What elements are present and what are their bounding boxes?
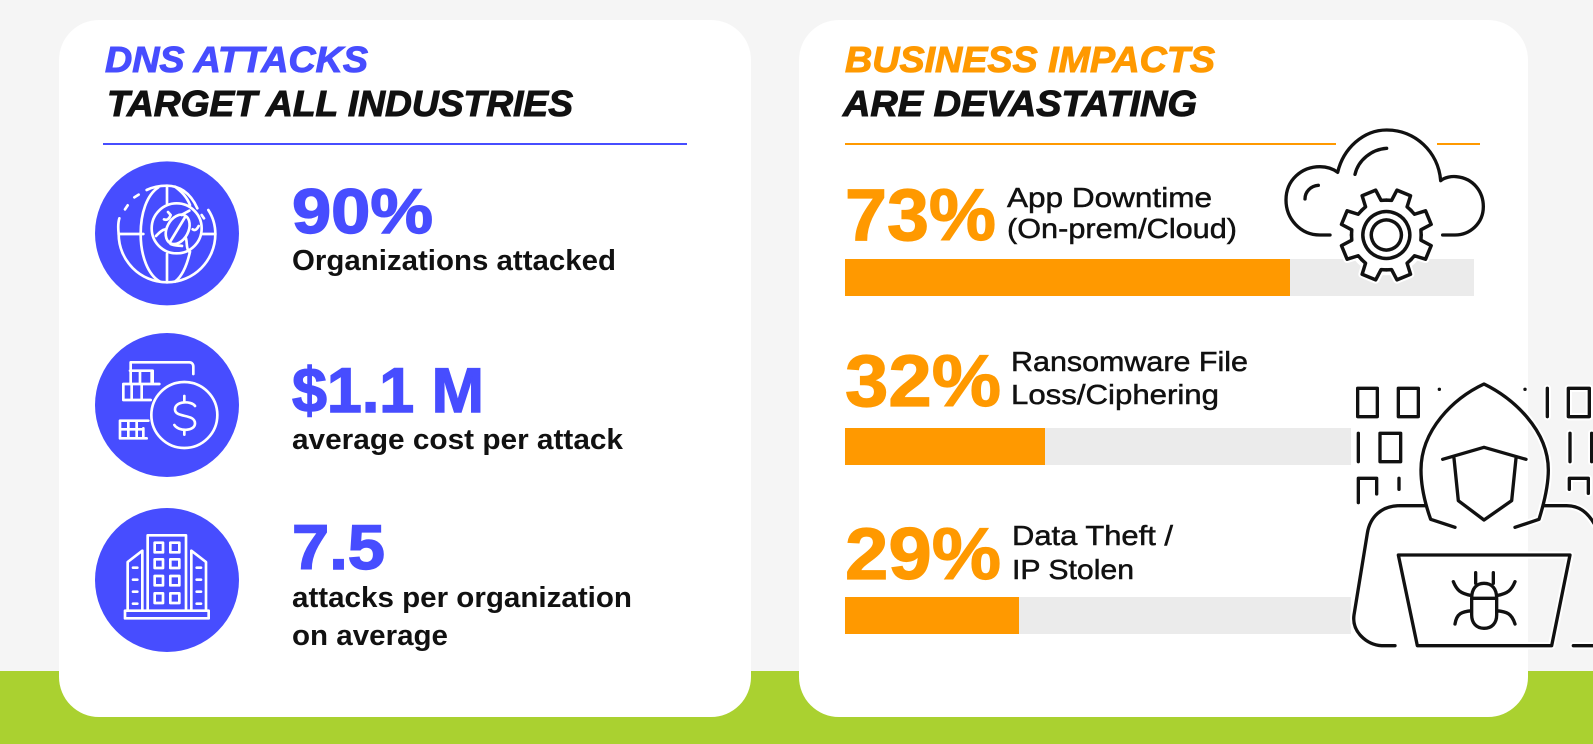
bar: 32% (845, 428, 1351, 465)
stat: 73% app downtime (845, 175, 1237, 256)
stat: 90% organizations attacked: 90% (292, 177, 433, 247)
icon: hooded hacker with laptop (1354, 384, 1593, 646)
stat: 32% ransomware: 32% (845, 341, 1001, 422)
bar: 73% (845, 259, 1474, 296)
bar: 29% (845, 597, 1351, 634)
stat: 90% organizations attacked: Organizations attacked (292, 245, 616, 277)
stat: 7.5 attacks per organization: attacks per organization (292, 582, 632, 614)
stat: $1.1 M average cost: average cost per attack (292, 424, 624, 456)
stat: 73% app downtime: 73% (845, 175, 996, 256)
heading: DNS attacks target all industries: DNS ATTACKS (105, 39, 368, 80)
stat: 32% ransomware: Loss/Ciphering (1011, 379, 1219, 410)
panel: DNS attacks (59, 20, 751, 717)
stat: 29% data theft: Data Theft / (1012, 520, 1173, 551)
stat: 7.5 attacks per organization (292, 513, 632, 652)
stat: 73% app downtime: (On-prem/Cloud) (1007, 213, 1237, 244)
heading: business impacts are devastating (842, 39, 1215, 124)
icon: office buildings (95, 508, 239, 652)
stat: $1.1 M average cost (292, 356, 624, 456)
panel: business impacts (799, 20, 1528, 717)
icon: globe with bug (95, 161, 239, 305)
stat: 32% ransomware (845, 341, 1248, 422)
stat: 7.5 attacks per organization: 7.5 (292, 513, 385, 583)
stat: $1.1 M average cost: $1.1 M (292, 356, 484, 426)
icon: cloud with gear (1286, 130, 1483, 294)
heading: DNS attacks target all industries (105, 39, 573, 124)
stat: 73% app downtime: App Downtime (1007, 182, 1212, 213)
stat: 29% data theft: IP Stolen (1012, 554, 1134, 585)
stat: 32% ransomware: Ransomware File (1011, 346, 1248, 377)
stat: 7.5 attacks per organization: on average (292, 620, 448, 652)
heading: DNS attacks target all industries: TARGET ALL INDUSTRIES (107, 83, 573, 124)
icon: coins and bricks with dollar (95, 333, 239, 477)
heading: business impacts are devastating: ARE DEVASTATING (842, 83, 1197, 124)
heading: business impacts are devastating: BUSINESS IMPACTS (845, 39, 1215, 80)
stat: 90% organizations attacked (292, 177, 616, 277)
stat: 29% data theft: 29% (845, 514, 1001, 595)
stat: 29% data theft (845, 514, 1173, 595)
